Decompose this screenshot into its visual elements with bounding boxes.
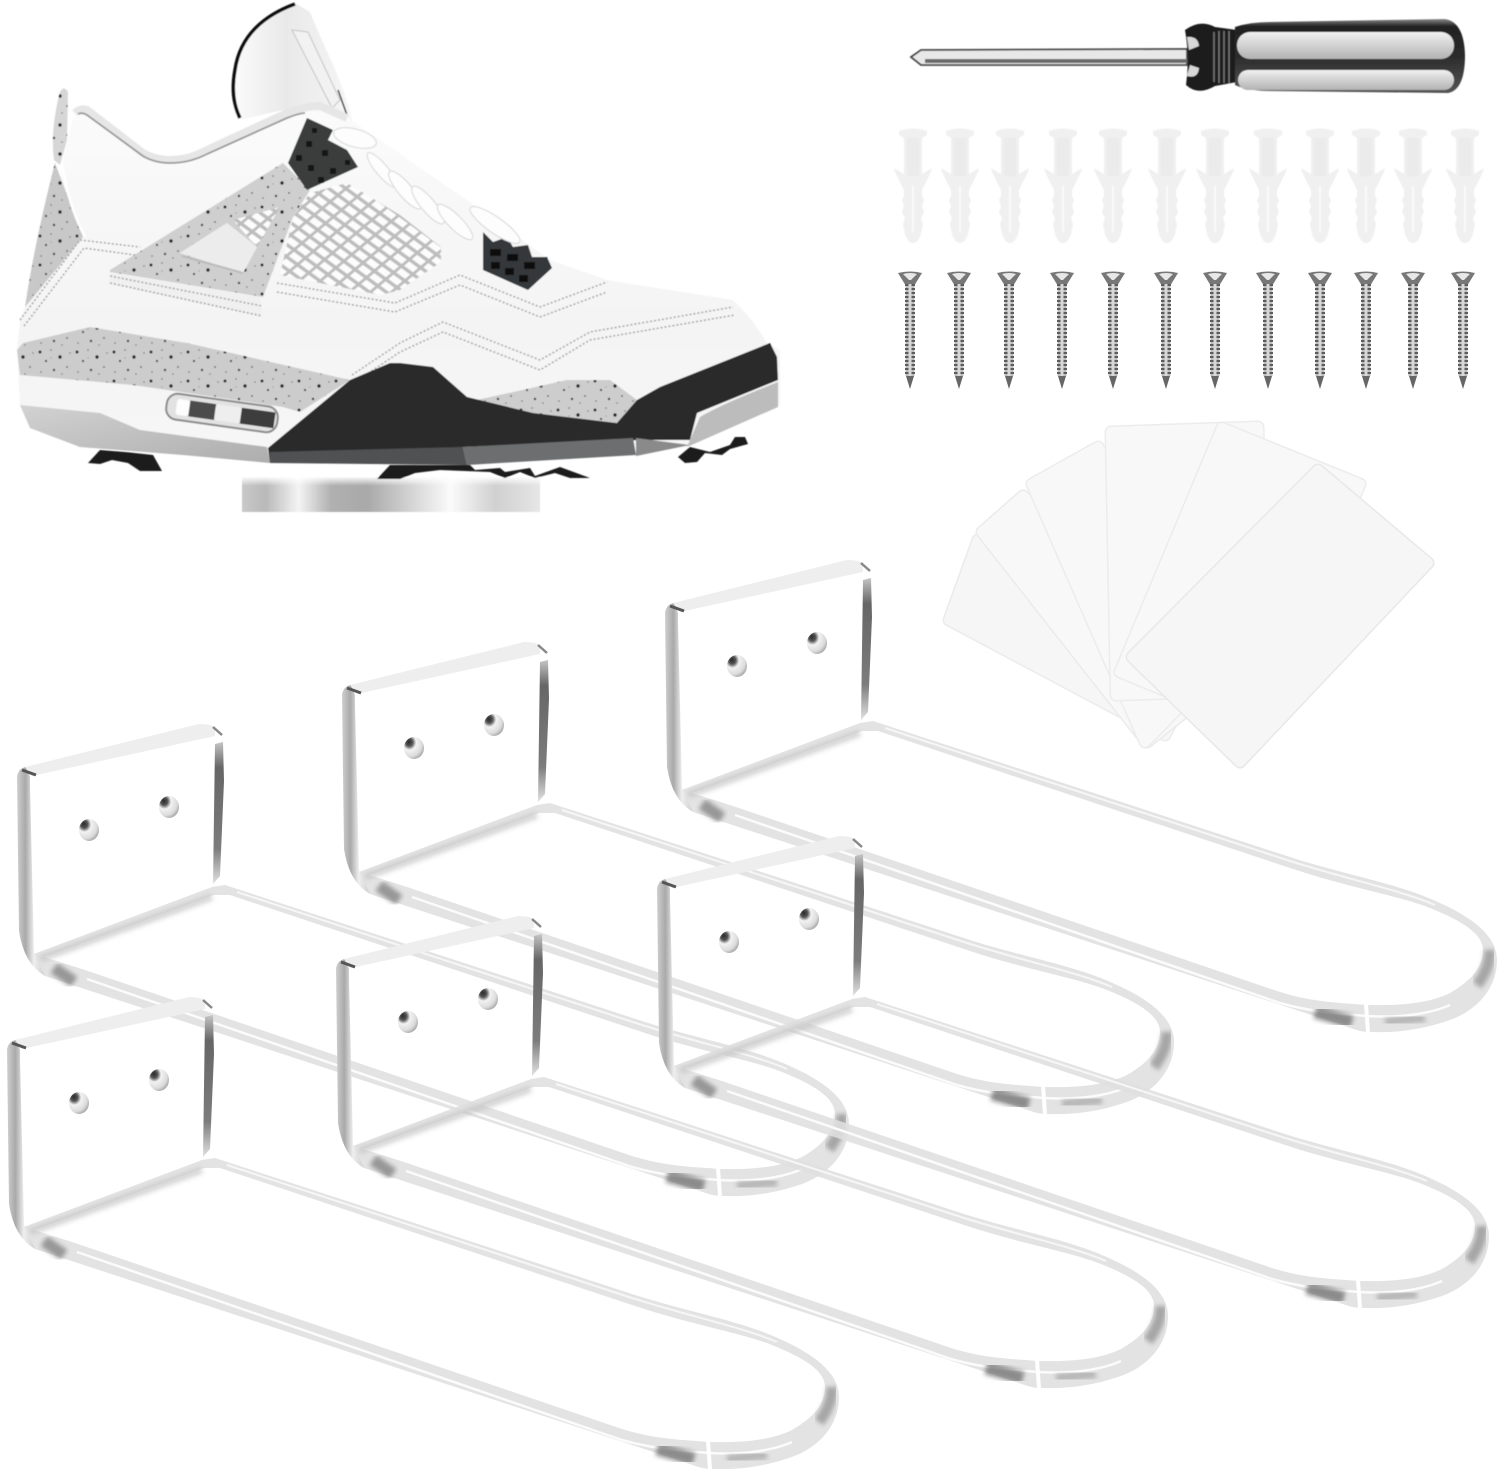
shelf 2 [342, 642, 1174, 1114]
neck ribs [1214, 31, 1229, 83]
shelf 5 [336, 916, 1168, 1388]
speckled wing [110, 163, 310, 297]
shoe upper [17, 103, 780, 465]
screws [898, 272, 1475, 389]
sole left strip [270, 447, 467, 465]
sole right strip [636, 438, 690, 456]
bottom grip highlight [1238, 70, 1454, 90]
wall anchors [894, 128, 1484, 243]
wing stitched strip [110, 273, 262, 317]
heel panel speckled [25, 162, 85, 307]
shelf 6 [7, 997, 839, 1469]
handle [1235, 19, 1465, 93]
black sole wedge [268, 343, 778, 463]
air unit [165, 392, 279, 434]
tongue edge [233, 4, 295, 118]
heel outsole [20, 405, 270, 463]
heel tongue panel [232, 3, 352, 120]
laces [331, 124, 524, 249]
tongue right edge [338, 90, 347, 115]
shaft shadow [925, 59, 1187, 63]
cleats [88, 437, 748, 479]
tongue label [292, 30, 340, 108]
shelf 3 [17, 724, 849, 1196]
neck [1185, 24, 1237, 91]
collar lining [75, 106, 347, 163]
top grip highlight [1237, 32, 1454, 59]
screwdriver [911, 19, 1465, 93]
sole grey strip [463, 438, 636, 465]
neck highlights [1187, 37, 1199, 77]
mesh side panel [280, 183, 441, 295]
toe sole grey [687, 382, 778, 447]
top lace eyelet [288, 118, 358, 190]
adhesive pads fan [949, 427, 1428, 762]
display stand [242, 477, 540, 512]
shelf 4 [657, 836, 1489, 1308]
stitched panel lines [20, 240, 735, 380]
shaft [911, 49, 1187, 65]
midsole speckled [17, 327, 350, 412]
toe speckled panel [477, 380, 637, 423]
heel tab [53, 88, 68, 165]
shelf 1 [665, 560, 1497, 1032]
lower lace eyelet [483, 232, 552, 290]
golf shoe on round stand [17, 3, 780, 512]
